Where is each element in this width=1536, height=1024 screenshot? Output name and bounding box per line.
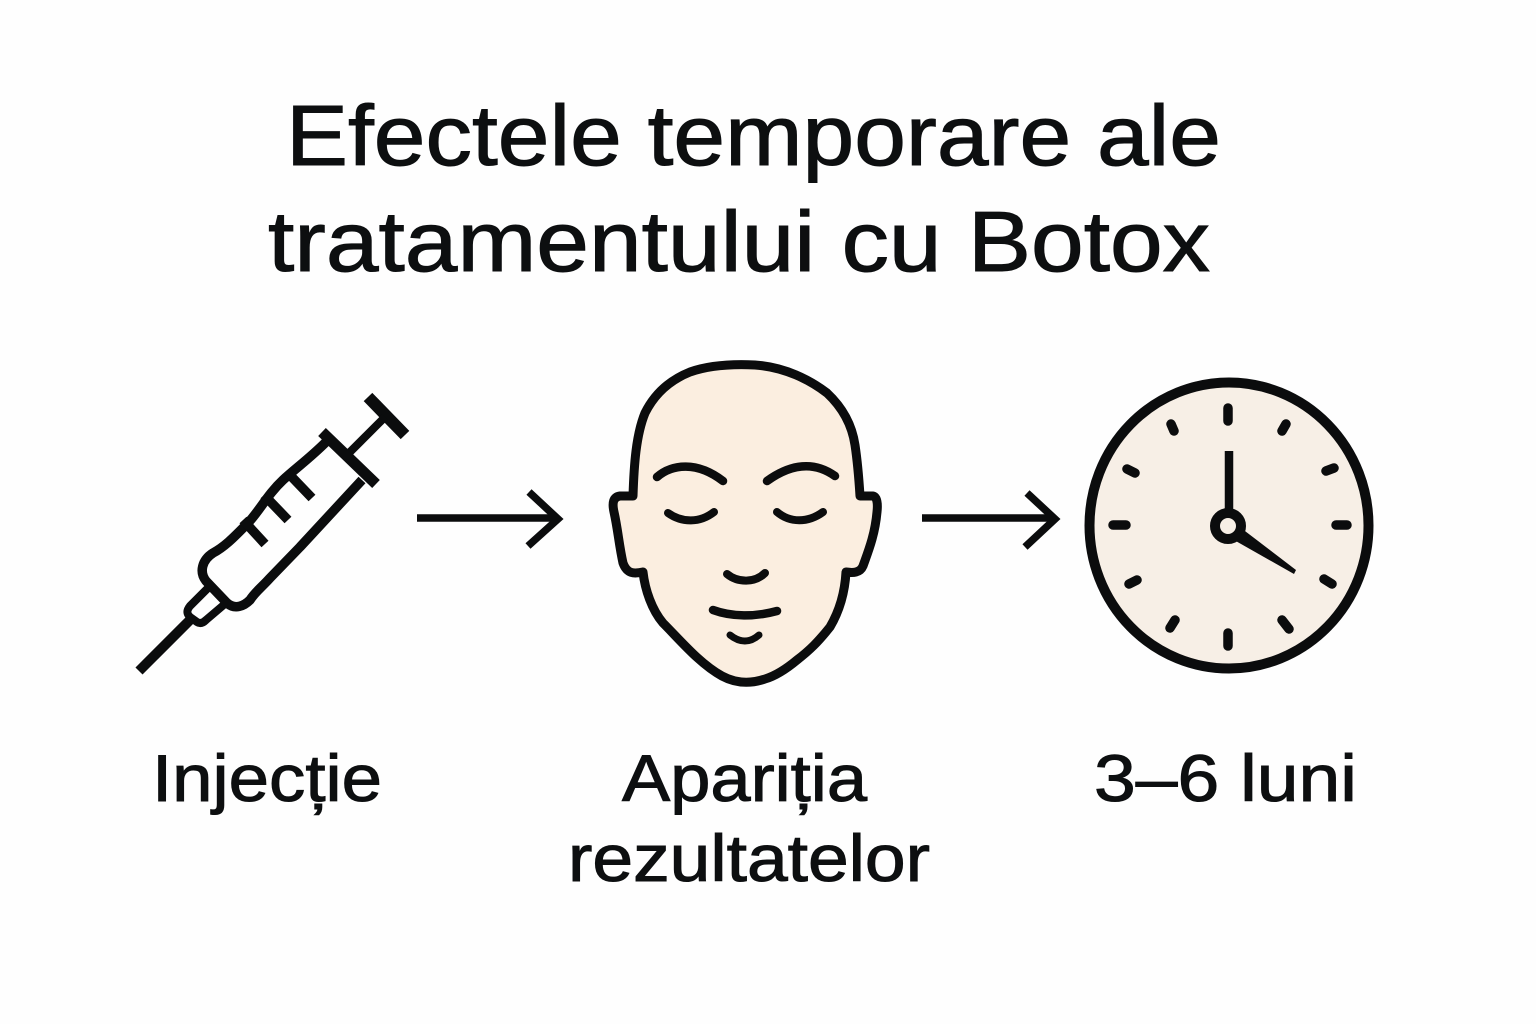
face outline [613,365,877,682]
label: appearance of results: Apariția [622,741,867,815]
icon: clock [1090,382,1368,668]
title [268,89,1221,290]
nose [727,573,765,581]
closed eyes [668,512,823,520]
label: injection: Injecție [152,741,382,815]
icon: face [613,365,877,682]
title: tratamentului cu Botox [268,195,1210,290]
eyebrows [657,466,835,481]
chin [730,635,759,641]
title: Efectele temporare ale [286,89,1221,184]
arrow: results to duration [922,493,1055,547]
arrow: injection to results [417,492,558,546]
label: duration: 3–6 luni [1094,741,1357,815]
label: appearance of results: rezultatelor [568,821,930,895]
icon: syringe [139,397,405,671]
mouth [713,610,777,615]
label: appearance of results [568,741,930,895]
